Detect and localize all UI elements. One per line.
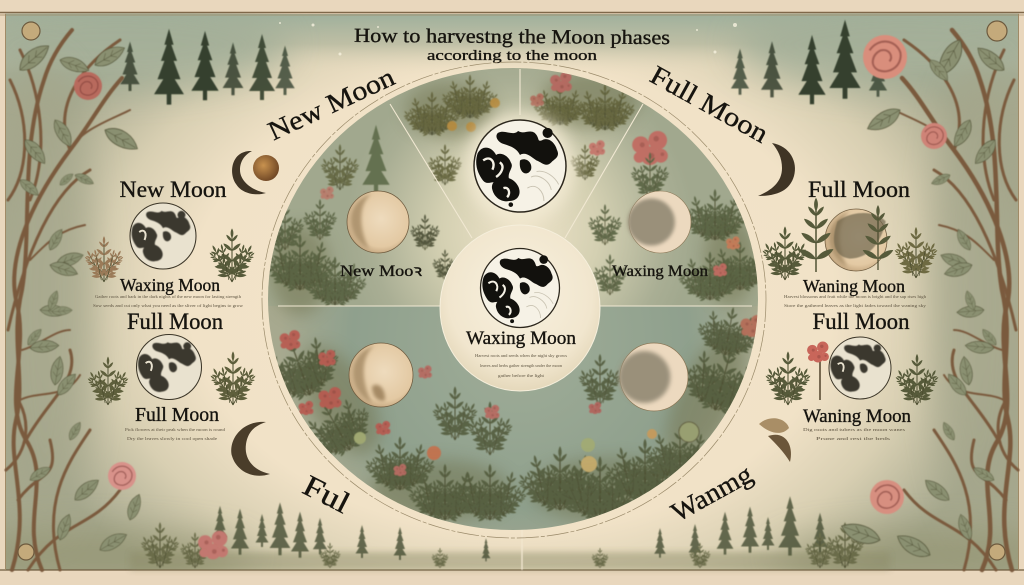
heading: Full Moon (808, 177, 911, 202)
moon: top full (474, 120, 566, 212)
plants: lower left sector (276, 330, 526, 522)
subtitle: according to the moon (427, 48, 598, 64)
wheel outer ring (262, 62, 766, 538)
caption: Sow seeds and cut only what you need as the sliver of light begins to grow (93, 303, 244, 308)
caption: Dig roots and tubers as the moon wanes (803, 427, 905, 432)
caption (784, 294, 927, 308)
curved label: Waning: Wanmg (666, 459, 757, 528)
glow behind top moon (465, 113, 575, 223)
caption (803, 427, 905, 441)
left column: new moon block (79, 177, 261, 308)
herbs (759, 342, 944, 410)
centre caption (475, 353, 567, 378)
moon: upper right phase (628, 191, 691, 253)
moon: lower left phase (349, 343, 413, 407)
title: How to harvestng the Moon phases (354, 25, 670, 49)
centre caption: leaves and herbs gather strength under the moon (480, 363, 563, 368)
lower wheel panels (260, 306, 770, 536)
moon: upper left phase (347, 191, 409, 253)
heading: Full Moon (127, 309, 223, 334)
sublabel: Waxing Moon (120, 275, 220, 295)
caption: Gather roots and bark in the dark nights of the new moon for lasting strength (95, 294, 242, 299)
moon (130, 203, 196, 269)
sublabel: Full Moon (135, 404, 219, 426)
crescent: upper left (232, 151, 279, 194)
title (354, 25, 670, 64)
caption: Dry the leaves slowly in cool open shade (127, 436, 217, 441)
upper wheel panels (260, 60, 770, 306)
treeline: top left (120, 29, 295, 105)
side vine: left (6, 30, 228, 570)
wheel dividers (278, 69, 752, 306)
caption: Pick flowers at their peak when the moon is round (125, 427, 226, 432)
plants: upper left sector (270, 125, 454, 306)
bottom forest (130, 392, 890, 572)
side vine: right (839, 30, 1018, 570)
label: waxing moon in wheel: Waxing Moon (612, 263, 708, 280)
plants: upper right sector (588, 130, 758, 302)
waning shape: lower right (759, 418, 791, 462)
caption (125, 427, 226, 441)
sublabel: Waning Moon (803, 406, 911, 427)
centre medallion (440, 225, 600, 391)
phase wheel (242, 60, 782, 538)
caption: Store the gathered leaves as the light fades toward the waning sky (784, 303, 927, 308)
left column: full moon block (82, 309, 262, 441)
caption (93, 294, 244, 308)
herb: left (82, 357, 134, 409)
herb: brown (79, 236, 129, 286)
plant shadow mass (270, 72, 760, 522)
crescent: lower left (231, 422, 270, 476)
curved label: New Moon: New Moon (263, 61, 400, 146)
label: new moon in wheel: New Mooꝛ (340, 263, 422, 280)
heading: Full Moon (812, 309, 910, 334)
moon (825, 209, 887, 271)
right column: full moon block (756, 177, 943, 308)
caption: Prune and rest the beds (816, 436, 890, 441)
centre caption: Harvest roots and seeds when the night sky grows (475, 353, 567, 358)
moon: lower right phase (619, 343, 688, 411)
curved label: Full Moon: Full Moon (645, 59, 774, 149)
caption: Harvest blossoms and fruit while the moon is bright and the sap rises high (784, 294, 927, 299)
crescent: upper right (758, 143, 795, 196)
moon: centre (480, 248, 560, 328)
sublabel: Waning Moon (803, 276, 905, 296)
centre caption: gather before the light (498, 373, 545, 378)
heading: New Moon (120, 177, 227, 202)
herb: right (204, 351, 262, 410)
moon (829, 337, 891, 399)
label: waxing moon centre: Waxing Moon (466, 328, 576, 349)
herbs (756, 198, 943, 285)
herb: green (203, 228, 261, 287)
right column: full moon lower block (759, 309, 944, 441)
plants: lower right sector (518, 307, 758, 519)
treeline: top right (731, 20, 887, 104)
curved label: Ful: Ful (297, 469, 355, 520)
plants: top sector (396, 72, 643, 189)
moon (136, 334, 202, 400)
